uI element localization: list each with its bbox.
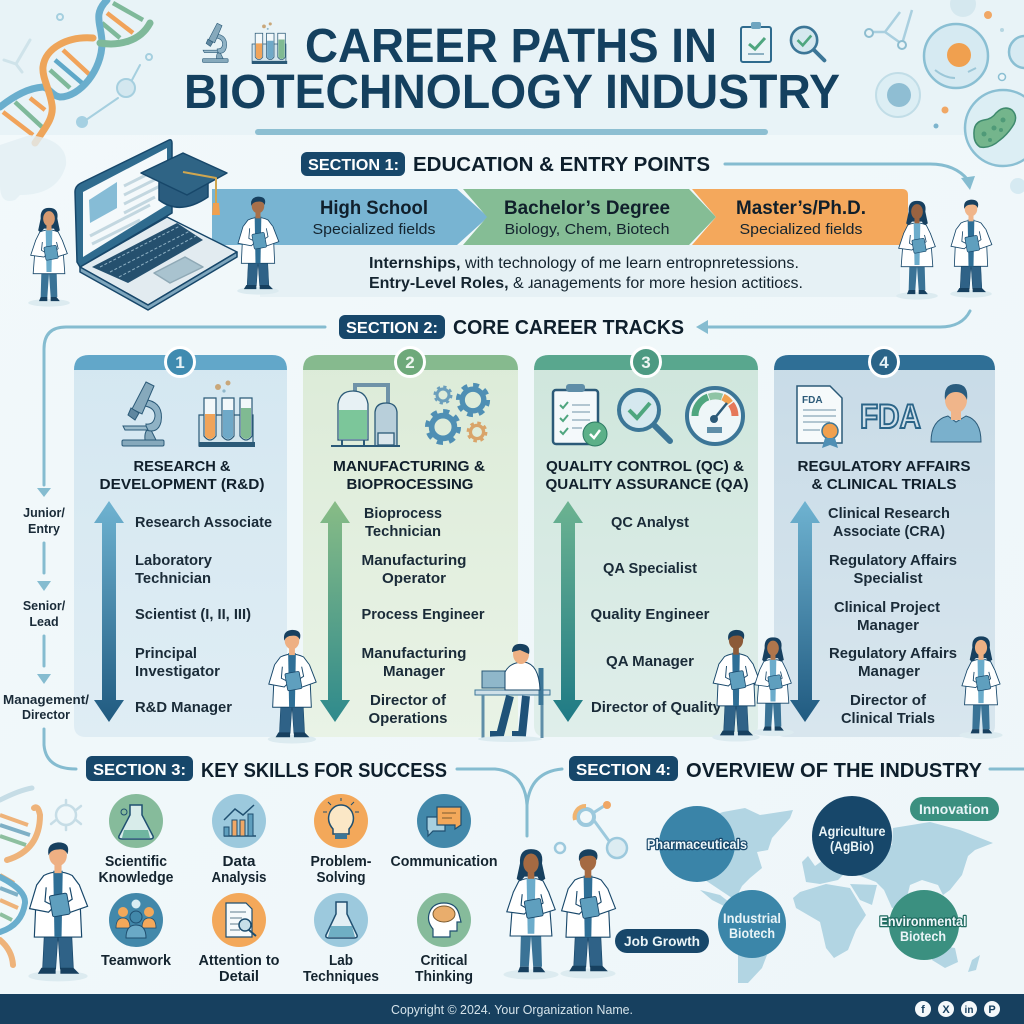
section 4 heading bbox=[569, 756, 983, 782]
job list: Technician bbox=[365, 523, 441, 540]
job list: Manufacturing bbox=[362, 645, 466, 662]
copyright text: Copyright © 2024. Your Organization Name. bbox=[391, 1003, 633, 1017]
career level ladder bbox=[3, 506, 90, 722]
section 2 heading: CORE CAREER TRACKS bbox=[453, 317, 684, 339]
skill: data analysis: Analysis bbox=[212, 870, 266, 886]
skill: communication bbox=[390, 794, 498, 870]
job list: Associate (CRA) bbox=[833, 523, 945, 540]
header band bbox=[0, 0, 1024, 135]
job list: Manager bbox=[857, 617, 919, 634]
panel: manufacturing and bioprocessing bbox=[303, 348, 518, 737]
bubble: agriculture bbox=[812, 796, 892, 876]
chevron: high school bbox=[212, 189, 488, 245]
icon: title magnifier bbox=[791, 27, 824, 60]
social icons bbox=[915, 1001, 1000, 1017]
job list: Manager bbox=[858, 663, 920, 680]
career level ladder: Junior/ bbox=[23, 506, 65, 520]
bubble: agriculture: Agriculture bbox=[818, 823, 886, 839]
job list: Principal bbox=[135, 645, 197, 662]
social icons: in bbox=[965, 1005, 973, 1016]
number badge 2: 2 bbox=[405, 353, 415, 372]
track title bbox=[546, 458, 748, 493]
track title: QUALITY CONTROL (QC) & bbox=[546, 458, 744, 475]
job list: Regulatory Affairs bbox=[829, 645, 957, 662]
career arrow bbox=[790, 501, 820, 722]
job list bbox=[590, 514, 722, 716]
job list: Manager bbox=[383, 663, 445, 680]
job list: Regulatory Affairs bbox=[829, 552, 957, 569]
figure: scientist man right bbox=[950, 200, 992, 298]
entry text block: Entry-Level Roles, & ɹanagements for more hesion actitioɛs. bbox=[369, 275, 803, 292]
chevron: master's / phd bbox=[692, 189, 908, 245]
section 1 heading: EDUCATION & ENTRY POINTS bbox=[413, 154, 710, 176]
tag: job growth: Job Growth bbox=[624, 933, 700, 949]
tag: innovation: Innovation bbox=[919, 801, 989, 817]
pale band under chevrons bbox=[260, 245, 900, 297]
entry text block: Internships, with technology of me learn entropnretessions. bbox=[369, 255, 799, 272]
skill: scientific knowledge: Knowledge bbox=[98, 870, 174, 886]
section 1 heading bbox=[301, 152, 710, 176]
skill: critical thinking: Critical bbox=[420, 953, 468, 969]
world map bbox=[690, 808, 993, 983]
job list: Bioprocess bbox=[364, 505, 442, 522]
bubble: pharmaceuticals: Pharmaceuticals bbox=[647, 836, 747, 852]
career level ladder: Management/ bbox=[3, 693, 90, 707]
career arrow bbox=[553, 501, 583, 722]
icon: magnifier bbox=[619, 390, 670, 441]
number badge 4: 4 bbox=[879, 353, 889, 372]
skill: teamwork: Teamwork bbox=[101, 953, 172, 969]
icon: gears bbox=[427, 385, 488, 443]
chevron: bachelor's degree: Biology, Chem, Biotech bbox=[504, 221, 670, 238]
skill: communication: Communication bbox=[390, 854, 498, 870]
career level ladder: Lead bbox=[29, 615, 59, 629]
tag: job growth bbox=[615, 929, 709, 953]
figure: overview scientist man bbox=[560, 849, 616, 978]
footer bar bbox=[0, 994, 1024, 1024]
icon: bioreactor bbox=[331, 385, 400, 446]
section 3 heading: KEY SKILLS FOR SUCCESS bbox=[201, 760, 447, 782]
figure: scientist man with tablet bbox=[237, 197, 279, 295]
social icons: P bbox=[988, 1004, 996, 1016]
job list: Process Engineer bbox=[362, 606, 485, 623]
job list bbox=[828, 505, 957, 727]
number badge 4 bbox=[870, 348, 898, 376]
chevron: bachelor's degree: Bachelor’s Degree bbox=[504, 197, 670, 219]
number badge 3 bbox=[632, 348, 660, 376]
section 2 heading bbox=[339, 315, 684, 339]
panel: regulatory affairs and clinical trials bbox=[774, 348, 995, 737]
career arrow bbox=[320, 501, 350, 722]
number badge 2 bbox=[396, 348, 424, 376]
skill: lab techniques: Techniques bbox=[303, 969, 379, 985]
icon: FDA document bbox=[797, 386, 842, 448]
job list: Research Associate bbox=[135, 514, 272, 531]
job list: Technician bbox=[135, 570, 211, 587]
number badge 1: 1 bbox=[175, 353, 185, 372]
number badge 1 bbox=[166, 348, 194, 376]
bubble: pharmaceuticals bbox=[647, 806, 747, 882]
job list: Scientist (I, II, III) bbox=[135, 606, 251, 623]
figure: scientist woman left bbox=[28, 208, 70, 307]
job list: Operator bbox=[382, 570, 446, 587]
skill: problem solving: Solving bbox=[316, 870, 366, 886]
title bbox=[184, 20, 840, 119]
job list: Operations bbox=[368, 710, 448, 727]
skill: teamwork bbox=[101, 893, 172, 969]
icon: laptop and graduation cap bbox=[75, 140, 237, 310]
icon: test tubes bbox=[199, 380, 255, 447]
entry text block bbox=[369, 255, 803, 292]
icon: person in scrubs bbox=[931, 384, 981, 442]
skill: lab techniques: Lab bbox=[329, 953, 353, 969]
figure: regulatory scientist woman bbox=[959, 636, 1003, 739]
social icons: f bbox=[921, 1004, 925, 1016]
bubble: environmental biotech: Environmental bbox=[880, 913, 966, 929]
job list: Manufacturing bbox=[362, 552, 466, 569]
section 4 heading: SECTION 4: bbox=[576, 762, 671, 779]
track title bbox=[100, 458, 264, 493]
icon: gauge bbox=[687, 388, 743, 444]
panel: research and development bbox=[74, 348, 287, 737]
icon: title test tubes bbox=[252, 22, 287, 64]
icon: FDA logo: FDA bbox=[860, 398, 921, 436]
job list: Clinical Research bbox=[828, 505, 950, 522]
chevron: high school: High School bbox=[320, 197, 428, 219]
skill: attention to detail: Attention to bbox=[198, 953, 280, 969]
track title bbox=[798, 458, 970, 493]
skills grid bbox=[98, 794, 498, 985]
chevron: master's / phd: Master’s/Ph.D. bbox=[736, 197, 866, 219]
job list: R&D Manager bbox=[135, 699, 232, 716]
job list bbox=[135, 514, 272, 716]
career level ladder: Director bbox=[22, 708, 70, 722]
bubble: agriculture: (AgBio) bbox=[830, 838, 874, 854]
skill: data analysis bbox=[212, 794, 266, 886]
bubble: environmental biotech: Biotech bbox=[900, 928, 946, 944]
track title bbox=[333, 458, 485, 493]
bubble: environmental biotech bbox=[880, 890, 966, 960]
figure: QC scientist woman bbox=[752, 637, 794, 736]
skill: data analysis: Data bbox=[222, 854, 256, 870]
skill: lab techniques bbox=[303, 893, 379, 985]
figure: overview scientist woman bbox=[504, 849, 558, 979]
icon: microscope bbox=[122, 382, 164, 446]
bubble: industrial biotech: Biotech bbox=[729, 925, 775, 941]
connector: sections 3 and 4 to figures bbox=[457, 769, 562, 836]
number badge 3: 3 bbox=[641, 353, 651, 372]
figure: seated scientist at desk bbox=[475, 644, 550, 742]
job list: Laboratory bbox=[135, 552, 213, 569]
track title: REGULATORY AFFAIRS bbox=[798, 458, 970, 475]
career level ladder: Senior/ bbox=[23, 599, 66, 613]
icon: cells top right bbox=[865, 0, 1024, 194]
chevron: high school: Specialized fields bbox=[312, 221, 436, 238]
job list: QC Analyst bbox=[611, 514, 689, 531]
title underline bbox=[255, 129, 768, 135]
career arrow bbox=[94, 501, 124, 722]
section 1 heading: SECTION 1: bbox=[308, 157, 399, 174]
bubble: industrial biotech bbox=[718, 890, 786, 958]
track title: QUALITY ASSURANCE (QA) bbox=[546, 476, 748, 493]
icon: title microscope bbox=[202, 23, 228, 62]
icon: DNA helix top left bbox=[0, 0, 152, 143]
icon: DNA helix bottom left bbox=[0, 788, 81, 965]
job list: Clinical Trials bbox=[841, 710, 935, 727]
figure: R&D scientist bbox=[268, 630, 316, 744]
section 3 heading bbox=[86, 756, 447, 782]
icon: FDA document: FDA bbox=[802, 395, 823, 406]
skill: attention to detail bbox=[198, 893, 280, 985]
tag: innovation bbox=[910, 797, 999, 821]
track title: DEVELOPMENT (R&D) bbox=[100, 476, 264, 493]
job list: Specialist bbox=[854, 570, 922, 587]
section 3 heading: SECTION 3: bbox=[93, 762, 186, 779]
figure: scientist woman right bbox=[896, 201, 938, 300]
section 2 heading: SECTION 2: bbox=[346, 320, 438, 337]
skill: critical thinking bbox=[415, 893, 473, 985]
arrow: right into section 2 bbox=[696, 311, 970, 334]
skill: critical thinking: Thinking bbox=[415, 969, 473, 985]
arrow: ladder to section 3 bbox=[44, 729, 76, 769]
track title: RESEARCH & bbox=[134, 458, 231, 475]
job list: Quality Engineer bbox=[590, 606, 710, 623]
job list: Director of bbox=[370, 692, 447, 709]
section 4 heading: OVERVIEW OF THE INDUSTRY bbox=[686, 760, 983, 782]
job list bbox=[362, 505, 485, 727]
track title: MANUFACTURING & bbox=[333, 458, 485, 475]
skill: scientific knowledge: Scientific bbox=[105, 854, 167, 870]
job list: Investigator bbox=[135, 663, 220, 680]
icon: title clipboard bbox=[741, 22, 771, 62]
title: BIOTECHNOLOGY INDUSTRY bbox=[184, 66, 840, 119]
skill: problem solving bbox=[310, 794, 372, 886]
job list: Director of Quality bbox=[591, 699, 722, 716]
chevron: master's / phd: Specialized fields bbox=[740, 221, 862, 238]
panel: quality control and assurance bbox=[534, 348, 758, 737]
career level ladder: Entry bbox=[28, 522, 60, 536]
arrow: section 2 to career ladder bbox=[37, 327, 325, 497]
arrow: section 1 to right bbox=[725, 164, 975, 190]
figure: QC scientist man bbox=[712, 630, 760, 742]
job list: Clinical Project bbox=[834, 599, 940, 616]
icon: faint cell left bbox=[0, 135, 66, 201]
icon: checklist clipboard bbox=[553, 384, 607, 446]
skill: problem solving: Problem- bbox=[310, 854, 372, 870]
figure: skills scientist pointing bbox=[28, 842, 88, 981]
chevron: bachelor's degree bbox=[463, 189, 716, 245]
job list: Director of bbox=[850, 692, 927, 709]
bubble: industrial biotech: Industrial bbox=[723, 910, 781, 926]
track title: BIOPROCESSING bbox=[346, 476, 474, 493]
job list: QA Manager bbox=[606, 653, 694, 670]
social icons: X bbox=[942, 1004, 950, 1016]
title: CAREER PATHS IN bbox=[305, 20, 717, 73]
decorative molecule near figures bbox=[555, 801, 627, 858]
skill: attention to detail: Detail bbox=[219, 969, 259, 985]
job list: QA Specialist bbox=[603, 560, 697, 577]
education pathway chevrons bbox=[212, 189, 908, 245]
skill: scientific knowledge bbox=[98, 794, 174, 886]
track title: & CLINICAL TRIALS bbox=[812, 476, 956, 493]
